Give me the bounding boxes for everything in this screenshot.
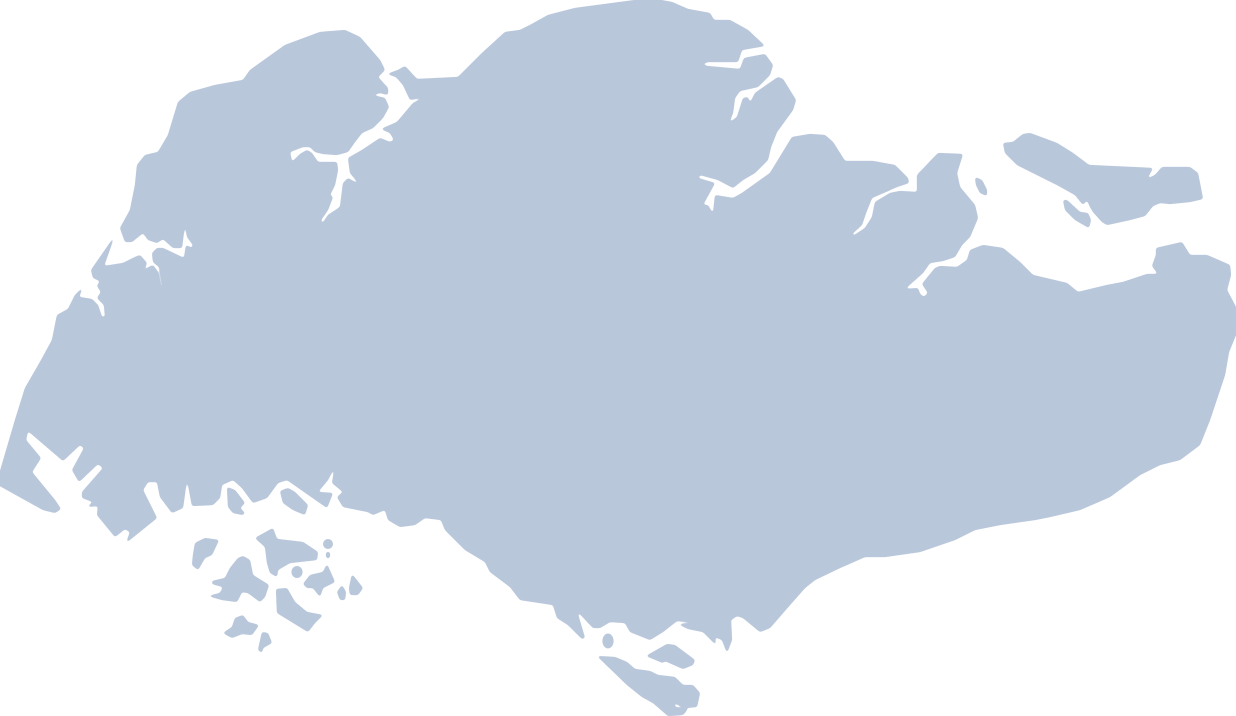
islet: teardrop 2 (349, 574, 363, 595)
islet: western bay (227, 487, 245, 515)
islet: south oval (602, 634, 614, 648)
islet: western bay 2 (280, 488, 308, 515)
island: Pulau Ubin (1003, 133, 1203, 225)
island: southern F (223, 615, 259, 638)
island: Sentosa (597, 656, 700, 716)
islet: southern A (192, 538, 219, 570)
island: southern G (258, 632, 272, 653)
island: southern D (303, 564, 335, 597)
island: southern B (255, 528, 318, 577)
island: southern E (276, 588, 323, 632)
islet: oval (292, 566, 302, 578)
islet: small round (323, 539, 333, 549)
island: southern C (208, 556, 269, 602)
islet: beside Ubin (1063, 200, 1091, 228)
island: south harbour (646, 644, 695, 669)
islet: tiny (326, 552, 330, 558)
islet: teardrop (337, 585, 346, 600)
islet: north-east small (975, 177, 987, 196)
